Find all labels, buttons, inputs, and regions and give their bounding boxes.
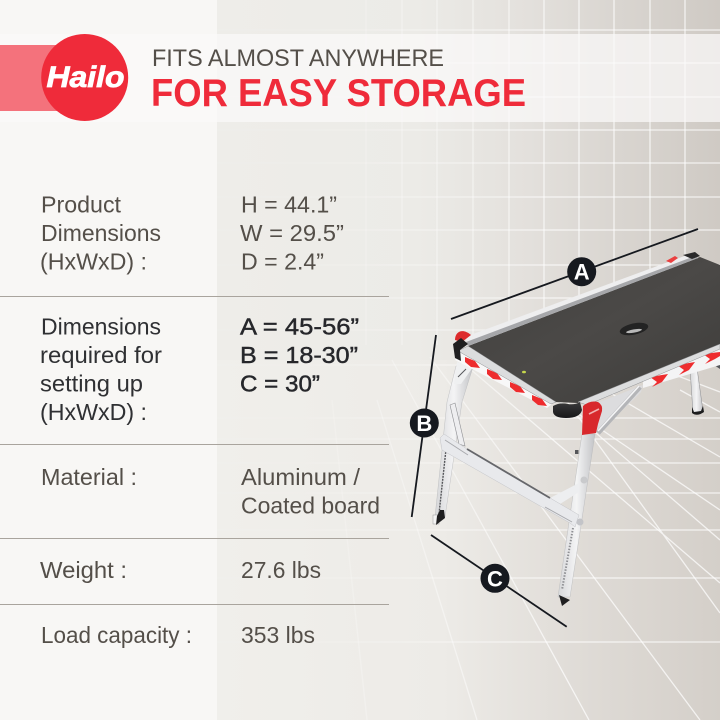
logo: Hailo: [41, 34, 128, 121]
back leg: [690, 362, 720, 415]
dimension C: C: [487, 566, 503, 591]
dimension A: A: [574, 260, 590, 284]
board top: [468, 257, 720, 403]
row: product dimensions: Dimensions: [41, 220, 161, 246]
row: material: Coated board: [241, 492, 380, 518]
row: load capacity: 353 lbs: [241, 622, 315, 648]
left panel: [0, 0, 217, 720]
row: material: Material :: [41, 464, 137, 490]
dimension B: [410, 335, 439, 517]
row: material: [41, 464, 380, 518]
row: product dimensions: W = 29.5”: [240, 220, 344, 246]
header band: [0, 34, 720, 122]
dimension C: [431, 535, 567, 627]
row: material: Aluminum /: [241, 464, 361, 490]
row: load capacity: [41, 622, 315, 648]
row: product dimensions: D = 2.4”: [241, 248, 324, 274]
row: dimensions required for setting up: required for: [40, 342, 162, 368]
logo tab: [0, 45, 60, 111]
row: dimensions required for setting up: (HxWxD) :: [40, 399, 147, 425]
row: weight: 27.6 lbs: [241, 557, 321, 583]
row: product dimensions: H = 44.1”: [241, 192, 337, 218]
row: dimensions required for setting up: B = 18-30”: [240, 342, 358, 368]
under frame and diagonal strut: [587, 385, 643, 433]
indicator dot: [522, 371, 526, 373]
dimension A: [451, 229, 698, 319]
row: dimensions required for setting up: A = 45-56”: [240, 314, 359, 340]
row: dimensions required for setting up: [40, 314, 359, 425]
row: load capacity: Load capacity :: [41, 622, 192, 648]
row: weight: Weight :: [40, 557, 127, 583]
right leg: [558, 434, 595, 606]
row: product dimensions: (HxWxD) :: [40, 248, 147, 274]
row: weight: [40, 557, 321, 583]
board front edges: [458, 344, 720, 405]
dimension B: B: [416, 411, 432, 436]
row: product dimensions: [40, 192, 344, 274]
corner caps: [453, 252, 700, 435]
product: work platform: [433, 252, 720, 606]
heading line 2: FOR EASY STORAGE: [151, 72, 526, 115]
back rail: [465, 254, 698, 346]
left leg: [433, 362, 473, 525]
cross bar: [440, 434, 584, 527]
row: product dimensions: Product: [41, 192, 122, 218]
row: dimensions required for setting up: C = 30”: [240, 370, 320, 396]
row: dimensions required for setting up: Dimensions: [41, 314, 161, 340]
logo: Hailo: Hailo: [46, 61, 124, 94]
handle cut-out: [619, 321, 649, 337]
left strip with chevrons: [455, 350, 552, 408]
row: dimensions required for setting up: setting up: [40, 370, 143, 396]
heading line 1: FITS ALMOST ANYWHERE: [152, 45, 444, 72]
right strip with chevrons: [643, 349, 720, 388]
